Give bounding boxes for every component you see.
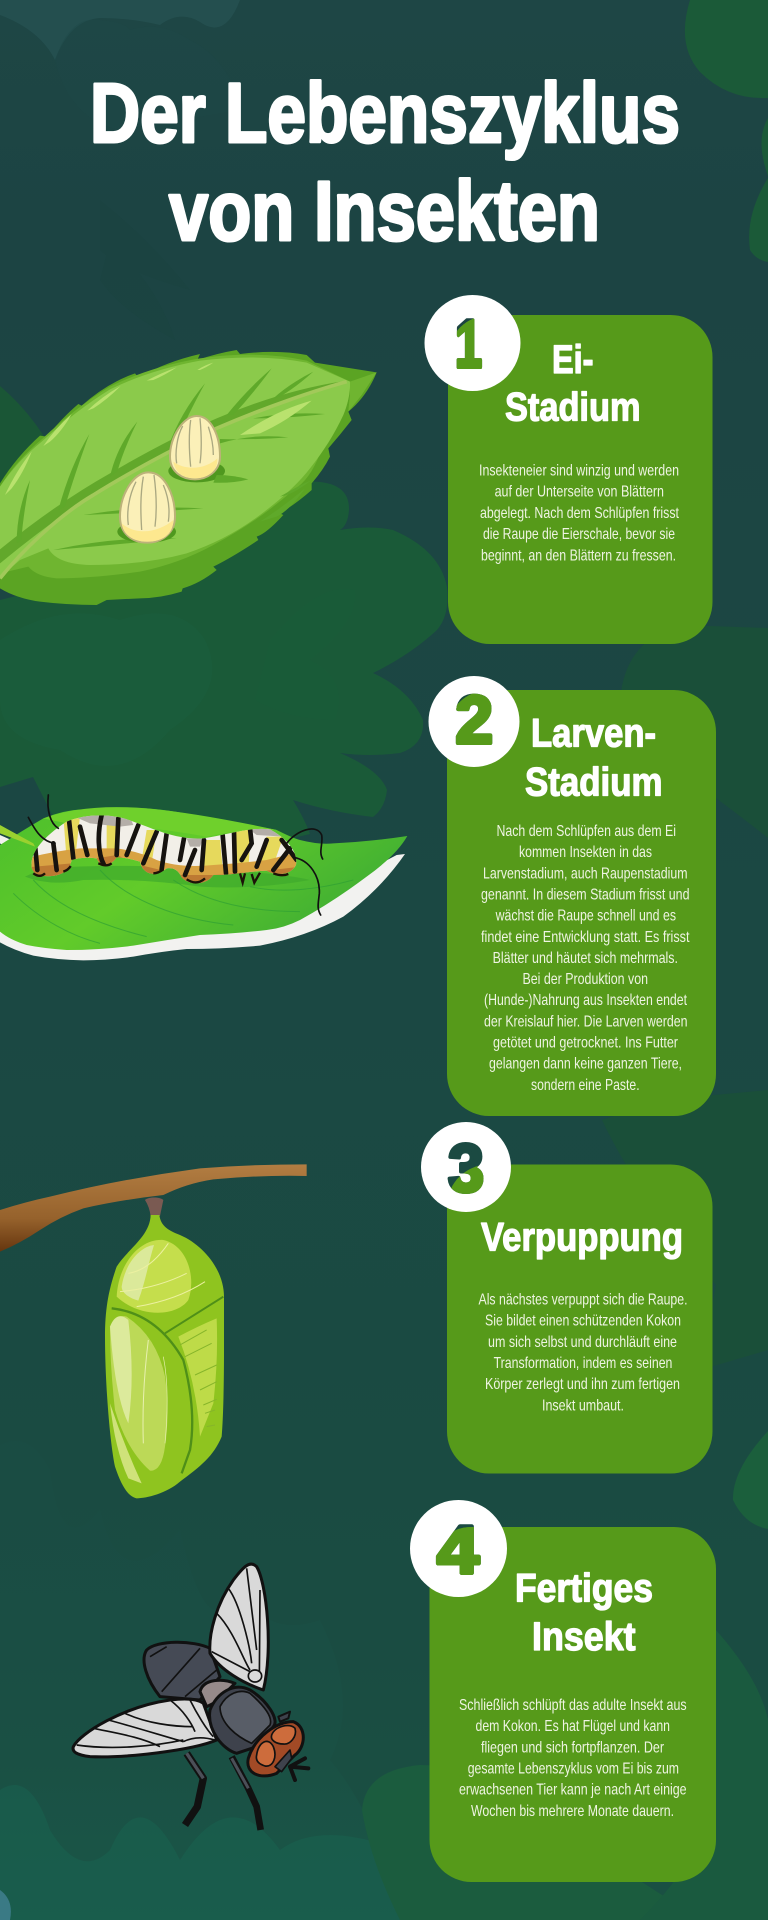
number badge 2	[428, 676, 520, 767]
body text 2: der Kreislauf hier. Die Larven werden	[484, 1013, 688, 1030]
body text 2: Blätter und häutet sich mehrmals.	[493, 950, 678, 967]
body text 2: Larvenstadium, auch Raupenstadium	[483, 865, 688, 882]
heading 2: Larven-	[531, 712, 656, 756]
number badge 2: 2	[456, 682, 493, 758]
heading 4	[515, 1566, 653, 1659]
body text 2: sondern eine Paste.	[531, 1077, 640, 1094]
body text 3: Insekt umbaut.	[542, 1397, 624, 1414]
body text 1	[479, 462, 679, 564]
body text 1: abgelegt. Nach dem Schlüpfen frisst	[480, 505, 679, 522]
body text 2: wächst die Raupe schnell und es	[495, 908, 676, 925]
illustration: chrysalis hanging from a branch	[0, 1164, 307, 1498]
number badge 4: 4	[437, 1512, 479, 1588]
body text 2: getötet und getrocknet. Ins Futter	[493, 1034, 679, 1052]
body text 2: (Hunde-)Nahrung aus Insekten endet	[484, 992, 687, 1009]
number badge 3: 3	[448, 1130, 484, 1206]
heading 4: Fertiges	[515, 1566, 653, 1610]
card background 4	[430, 1527, 716, 1882]
body text 3: Als nächstes verpuppt sich die Raupe.	[478, 1292, 688, 1308]
number badge 1: 1	[455, 306, 482, 382]
illustration: leaf with two eggs	[0, 350, 377, 605]
illustration: caterpillar on a leaf	[0, 795, 407, 960]
body text 2: gelangen dann keine ganzen Tiere,	[489, 1056, 682, 1073]
number badge 3	[421, 1122, 511, 1212]
body text 4	[459, 1697, 687, 1820]
panel: step 3 pupation	[421, 1122, 712, 1474]
body text 4: gesamte Lebenszyklus vom Ei bis zum	[468, 1760, 679, 1777]
body text 4: Wochen bis mehrere Monate dauern.	[471, 1803, 674, 1820]
number badge 1	[424, 295, 520, 391]
panel: step 1 egg stage	[424, 295, 712, 644]
body text 3	[478, 1292, 688, 1414]
heading 2	[525, 712, 662, 804]
heading 3: Verpuppung	[481, 1216, 683, 1260]
title: von Insekten	[169, 164, 600, 258]
heading 4: Insekt	[532, 1615, 636, 1659]
number badge 1: 1	[455, 306, 482, 382]
body text 2: Bei der Produktion von	[522, 971, 648, 988]
card background 1	[448, 315, 712, 644]
card background 3	[447, 1164, 712, 1474]
heading 1: Stadium	[505, 386, 640, 430]
body text 3: Sie bildet einen schützenden Kokon	[485, 1313, 681, 1330]
panel: step 2 larval stage	[428, 676, 716, 1116]
heading 1: Ei-	[552, 338, 594, 382]
heading 2: Stadium	[525, 760, 662, 804]
body text 1: beginnt, an den Blättern zu fressen.	[481, 547, 676, 564]
body text 3: Körper zerlegt und ihn zum fertigen	[485, 1376, 680, 1393]
title	[90, 66, 680, 258]
body text 1: die Raupe die Eierschale, bevor sie	[483, 526, 675, 543]
body text 3: um sich selbst und durchläuft eine	[488, 1334, 677, 1351]
number badge 3: 3	[448, 1130, 484, 1206]
number badge 4: 4	[437, 1512, 479, 1588]
number badge 2: 2	[456, 682, 493, 758]
body text 2	[481, 823, 690, 1094]
body text 1: Insekteneier sind winzig und werden	[479, 462, 679, 480]
body text 1: auf der Unterseite von Blättern	[495, 484, 664, 501]
body text 2: findet eine Entwicklung statt. Es frisst	[481, 929, 690, 946]
card background 2	[447, 690, 716, 1116]
body text 4: dem Kokon. Es hat Flügel und kann	[476, 1718, 670, 1735]
heading 1	[505, 338, 640, 430]
illustration: adult fly	[73, 1564, 308, 1830]
number badge 4	[410, 1500, 507, 1597]
body text 4: fliegen und sich fortpflanzen. Der	[481, 1739, 665, 1756]
body text 2: genannt. In diesem Stadium frisst und	[481, 886, 690, 903]
body text 4: erwachsenen Tier kann je nach Art einige	[459, 1782, 687, 1799]
panel: step 4 adult insect	[410, 1500, 716, 1882]
body text 4: Schließlich schlüpft das adulte Insekt aus	[459, 1697, 687, 1714]
body text 2: kommen Insekten in das	[519, 844, 652, 861]
body text 3: Transformation, indem es seinen	[494, 1355, 672, 1372]
body text 2: Nach dem Schlüpfen aus dem Ei	[496, 823, 676, 840]
